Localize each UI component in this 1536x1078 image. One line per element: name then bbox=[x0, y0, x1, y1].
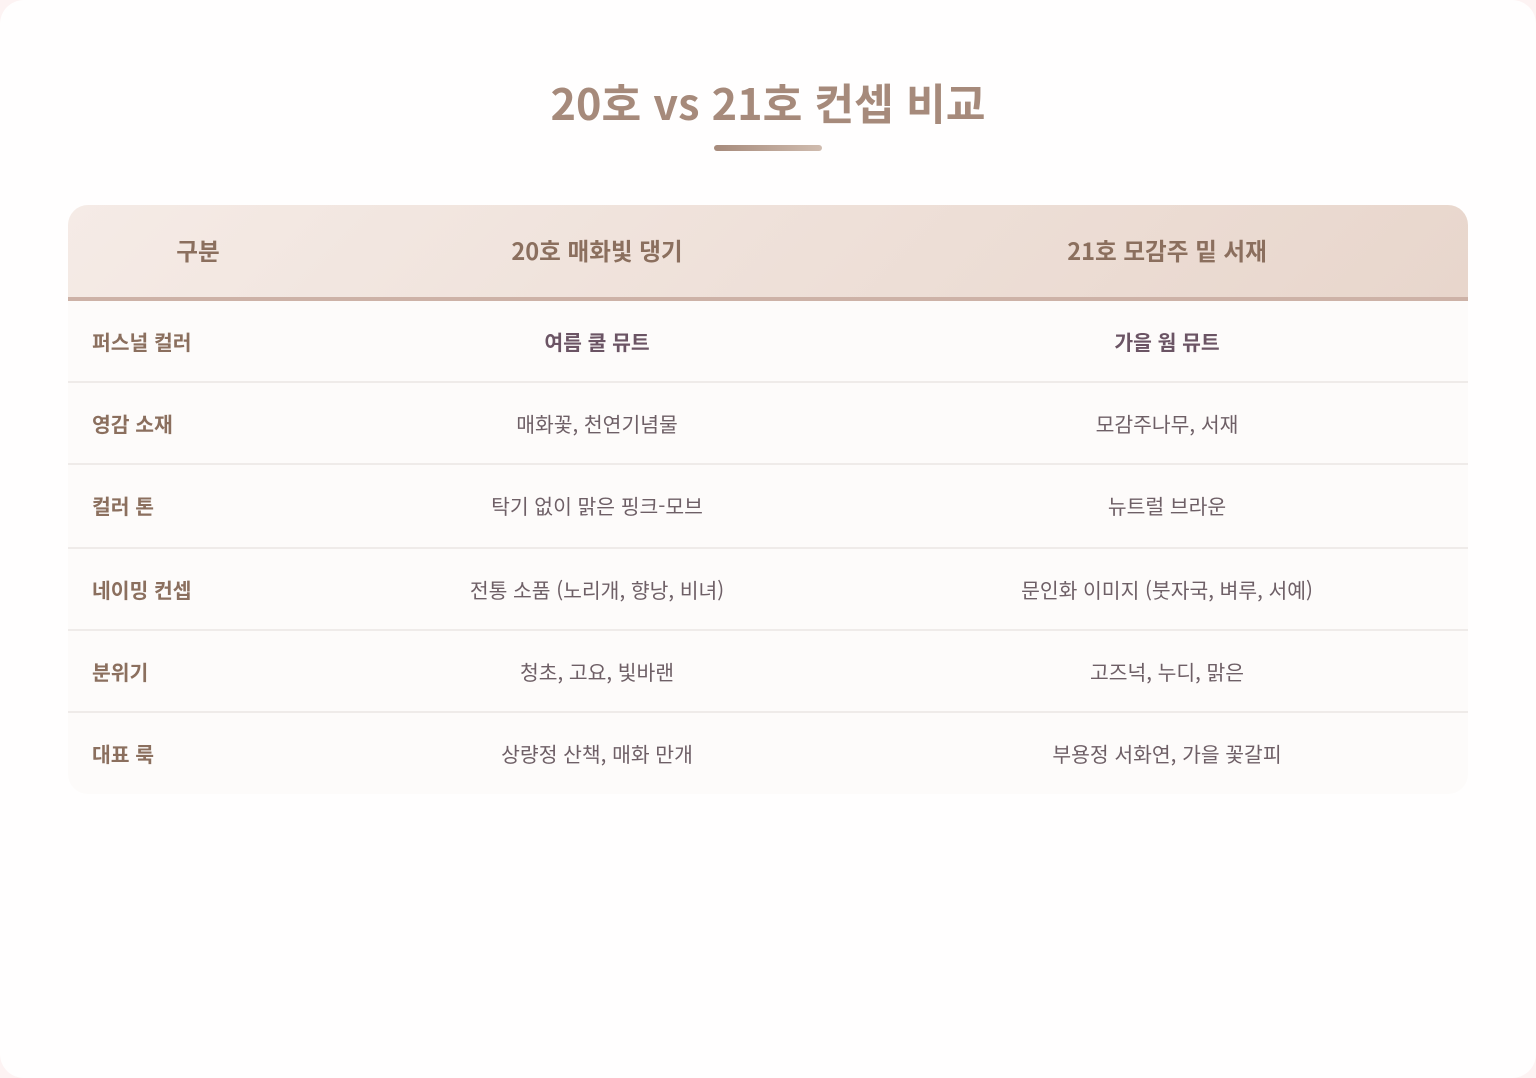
value: issue 20 color tone: 탁기 없이 맑은 핑크-모브 bbox=[491, 490, 703, 520]
value: issue 21 color tone: 뉴트럴 브라운 bbox=[1108, 490, 1226, 520]
row: mood bbox=[68, 631, 1468, 713]
value: issue 21 naming concept: 문인화 이미지 (붓자국, 벼루, 서예) bbox=[1021, 574, 1313, 604]
title underline bbox=[714, 145, 822, 151]
label: signature look: 대표 룩 bbox=[92, 738, 154, 768]
row: signature look bbox=[92, 738, 1282, 768]
label: color tone: 컬러 톤 bbox=[92, 490, 154, 520]
value: issue 21 signature look: 부용정 서화연, 가을 꽃갈피 bbox=[1052, 738, 1282, 768]
title: 20호 vs 21호 컨셉 비교 bbox=[551, 71, 985, 133]
row: color tone bbox=[68, 465, 1468, 549]
label: mood: 분위기 bbox=[92, 656, 148, 686]
row: personal color bbox=[68, 301, 1468, 383]
label: naming concept: 네이밍 컨셉 bbox=[92, 574, 192, 604]
value: issue 20 signature look: 상량정 산책, 매화 만개 bbox=[501, 738, 693, 768]
row: naming concept bbox=[68, 549, 1468, 631]
value: issue 20 inspiration: 매화꽃, 천연기념물 bbox=[516, 408, 678, 438]
header: issue 21: 21호 모감주 밑 서재 bbox=[1067, 233, 1267, 267]
row: inspiration bbox=[68, 383, 1468, 465]
header: issue 20: 20호 매화빛 댕기 bbox=[511, 233, 683, 267]
value: issue 21 inspiration: 모감주나무, 서재 bbox=[1096, 408, 1238, 438]
value: issue 20 mood: 청초, 고요, 빛바랜 bbox=[520, 656, 674, 686]
label: inspiration: 영감 소재 bbox=[92, 408, 173, 438]
table header row bbox=[68, 205, 1468, 301]
header: category: 구분 bbox=[176, 233, 220, 267]
value: issue 20 naming concept: 전통 소품 (노리개, 향낭, 비녀) bbox=[470, 574, 724, 604]
value: issue 21 mood: 고즈넉, 누디, 맑은 bbox=[1090, 656, 1244, 686]
value: issue 20 personal color: 여름 쿨 뮤트 bbox=[544, 326, 650, 356]
value: issue 21 personal color: 가을 웜 뮤트 bbox=[1114, 326, 1220, 356]
label: personal color: 퍼스널 컬러 bbox=[92, 326, 192, 356]
comparison table bbox=[68, 205, 1468, 794]
